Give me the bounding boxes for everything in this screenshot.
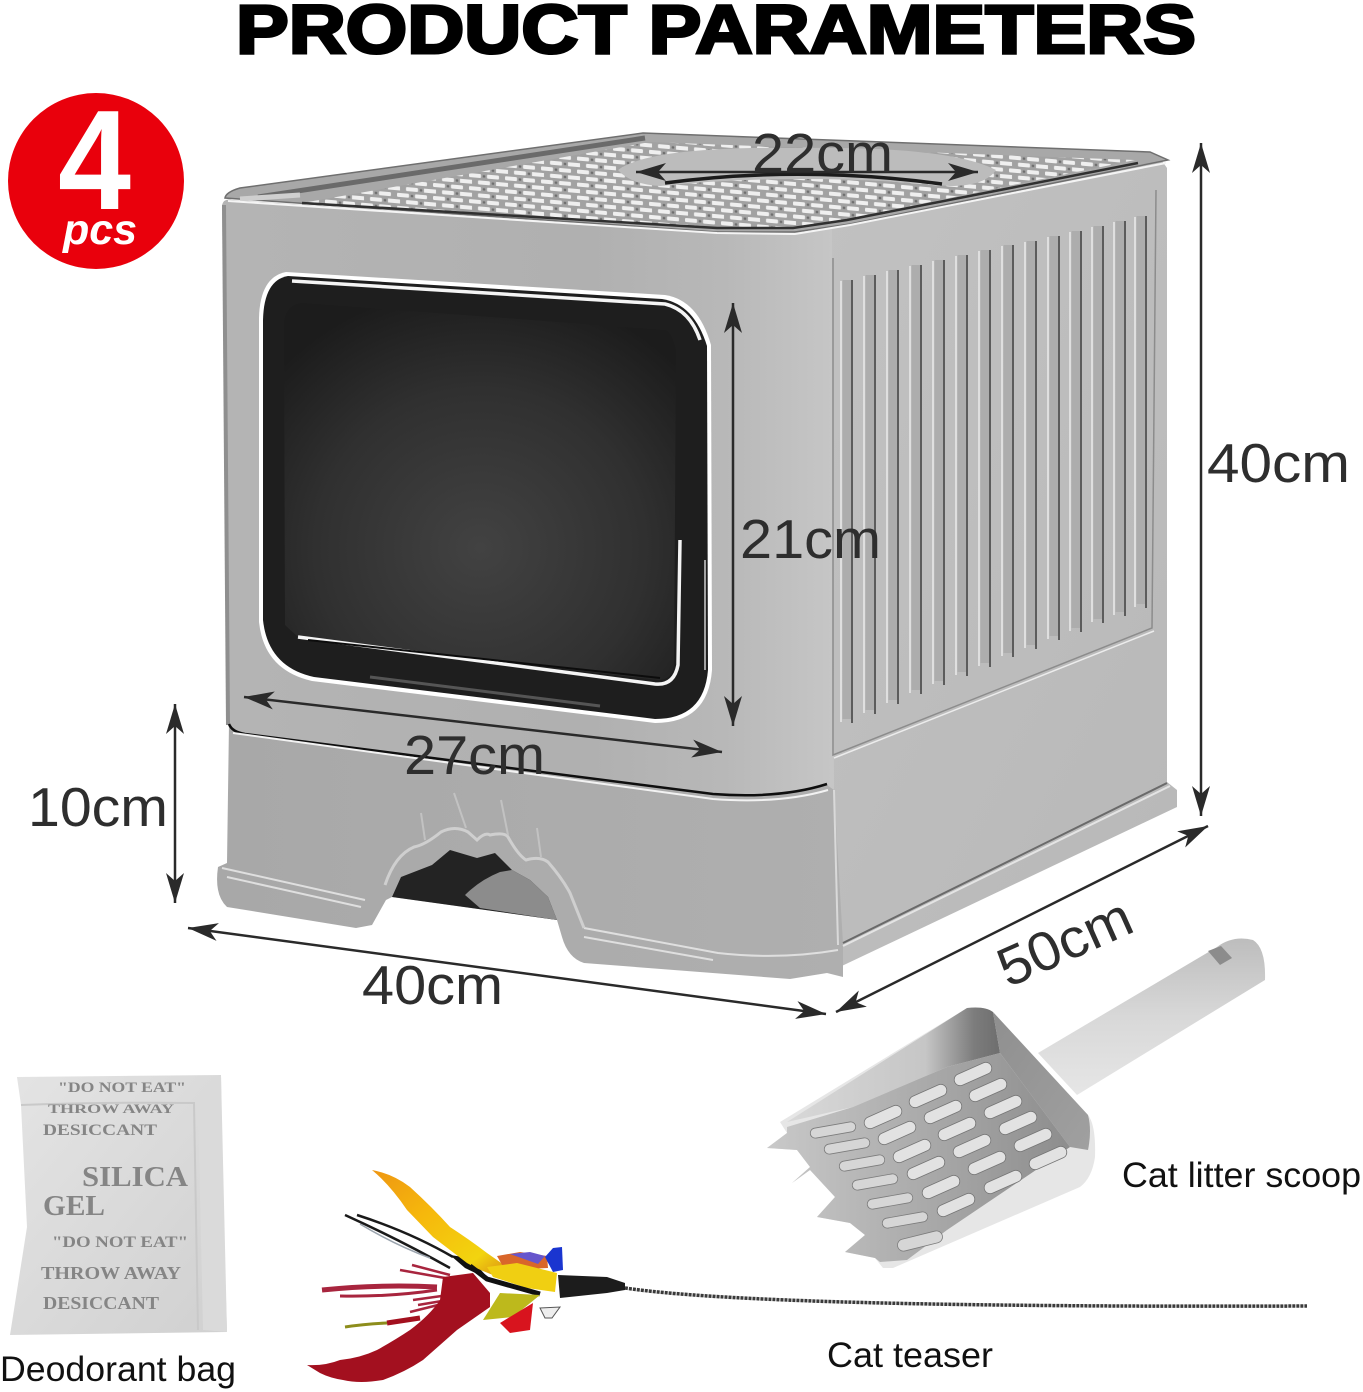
scoop upper wall <box>787 1008 1000 1122</box>
dimension: depth 50cm <box>836 826 1208 1012</box>
dimension: width 40cm <box>188 928 826 1016</box>
feather: olive barb <box>345 1323 387 1327</box>
teaser bell <box>540 1307 560 1318</box>
scoop floor <box>767 1053 1070 1262</box>
dimension: door width 27cm <box>244 697 722 786</box>
sachet print: "DO NOT EAT" <box>58 1080 186 1096</box>
label: cat litter scoop: Cat litter scoop <box>1122 1156 1361 1195</box>
dimension: drawer height 10cm: 10cm <box>28 776 168 838</box>
sachet print: DESICCANT <box>43 1122 157 1139</box>
dimension: height 40cm: 40cm <box>1207 432 1350 494</box>
feather: black plume <box>345 1215 453 1268</box>
dimension: door width 27cm: 27cm <box>404 724 545 786</box>
box side panel <box>770 158 1177 973</box>
sachet <box>10 1075 227 1335</box>
feather: head olive <box>483 1293 540 1320</box>
cat teaser illustration <box>307 1170 1307 1382</box>
feather: head yellow <box>487 1263 557 1292</box>
sachet print: "DO NOT EAT" <box>52 1234 188 1251</box>
scoop right wall <box>993 1012 1090 1150</box>
dimension: lid opening 22cm: 22cm <box>752 122 893 184</box>
sachet print: DESICCANT <box>43 1293 159 1313</box>
sachet print: THROW AWAY <box>41 1263 181 1283</box>
label: cat teaser: Cat teaser <box>827 1336 993 1375</box>
feather: blue tuft <box>545 1247 563 1272</box>
feather: yellow orange <box>372 1170 507 1277</box>
lid opening <box>618 148 996 186</box>
box lid <box>225 133 1168 234</box>
sachet print: THROW AWAY <box>48 1101 175 1116</box>
badge: 4 pcs: 4 <box>58 81 131 240</box>
feather: red barb <box>387 1318 420 1323</box>
dimension: width 40cm: 40cm <box>362 954 503 1016</box>
litter box illustration <box>217 133 1177 979</box>
scoop front slots <box>809 1121 944 1252</box>
wand <box>625 1288 1307 1306</box>
teaser clip <box>558 1275 625 1298</box>
box front panel <box>222 200 834 797</box>
sachet print: GEL <box>43 1191 105 1222</box>
feather: head fringe <box>497 1252 548 1270</box>
feather: red long <box>307 1273 490 1382</box>
box window <box>259 272 712 723</box>
badge: 4 pcs <box>8 81 184 269</box>
sachet print <box>41 1080 189 1313</box>
dimension: door height 21cm: 21cm <box>740 508 881 570</box>
badge: 4 pcs: pcs <box>62 206 137 254</box>
sachet print: SILICA <box>82 1162 189 1193</box>
feather: lower red <box>500 1303 533 1333</box>
dimension: depth 50cm: 50cm <box>988 885 1142 999</box>
scoop body <box>767 1008 1095 1268</box>
deodorant bag illustration <box>10 1075 227 1335</box>
scoop handle <box>1038 939 1265 1095</box>
side rib panel <box>833 190 1156 758</box>
litter scoop illustration <box>767 939 1265 1268</box>
label: deodorant bag: Deodorant bag <box>0 1350 236 1389</box>
box drawer <box>217 723 1170 979</box>
scoop slots <box>862 1060 1069 1219</box>
feather: head black <box>470 1266 540 1294</box>
feather: red wisps <box>322 1265 463 1312</box>
